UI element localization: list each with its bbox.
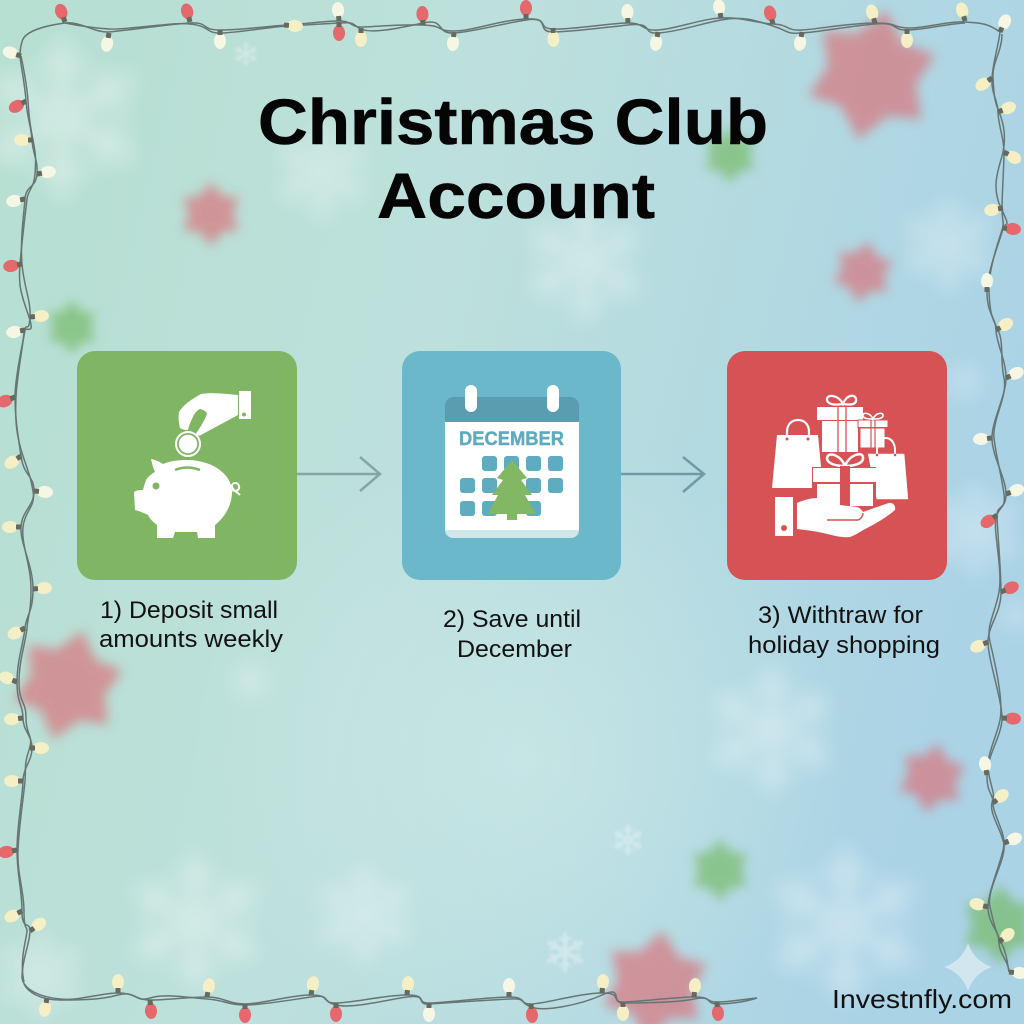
small snowflakes [236,43,640,970]
label: step 2 [443,606,581,663]
light bulbs: bottom [38,974,725,1023]
title: Christmas Club [258,86,768,158]
title [258,86,768,232]
panel: step 3 withdraw [727,351,947,580]
label: step 3: holiday shopping [748,632,940,659]
blurred green stars [49,127,1024,965]
light bulbs: right [968,73,1024,980]
icon: gifts and shopping bags on a hand [772,396,909,537]
icon: december calendar with tree [445,385,579,538]
label: step 3: 3) Withtraw for [758,602,923,629]
title: Account [377,160,655,232]
icon: sparkle watermark [944,943,992,991]
light bulbs: top [53,0,1013,53]
label: step 1: 1) Deposit small [100,597,278,624]
label: step 2: 2) Save until [443,606,581,633]
light bulbs: left [0,44,57,936]
brand text: Investnfly.com [832,984,1012,1014]
label: step 1 [99,597,283,653]
icon: hand with coin over piggy bank [134,391,251,538]
label: step 1: amounts weekly [99,626,283,653]
arrow: step 1 to step 2 [297,457,380,491]
label: step 2: December [457,636,572,663]
icon: december calendar with tree: DECEMBER [459,429,564,450]
panel: step 2 save [402,351,621,580]
label: step 3 [748,602,940,659]
panel: step 1 deposit [77,351,297,580]
arrow: step 2 to step 3 [621,457,704,492]
